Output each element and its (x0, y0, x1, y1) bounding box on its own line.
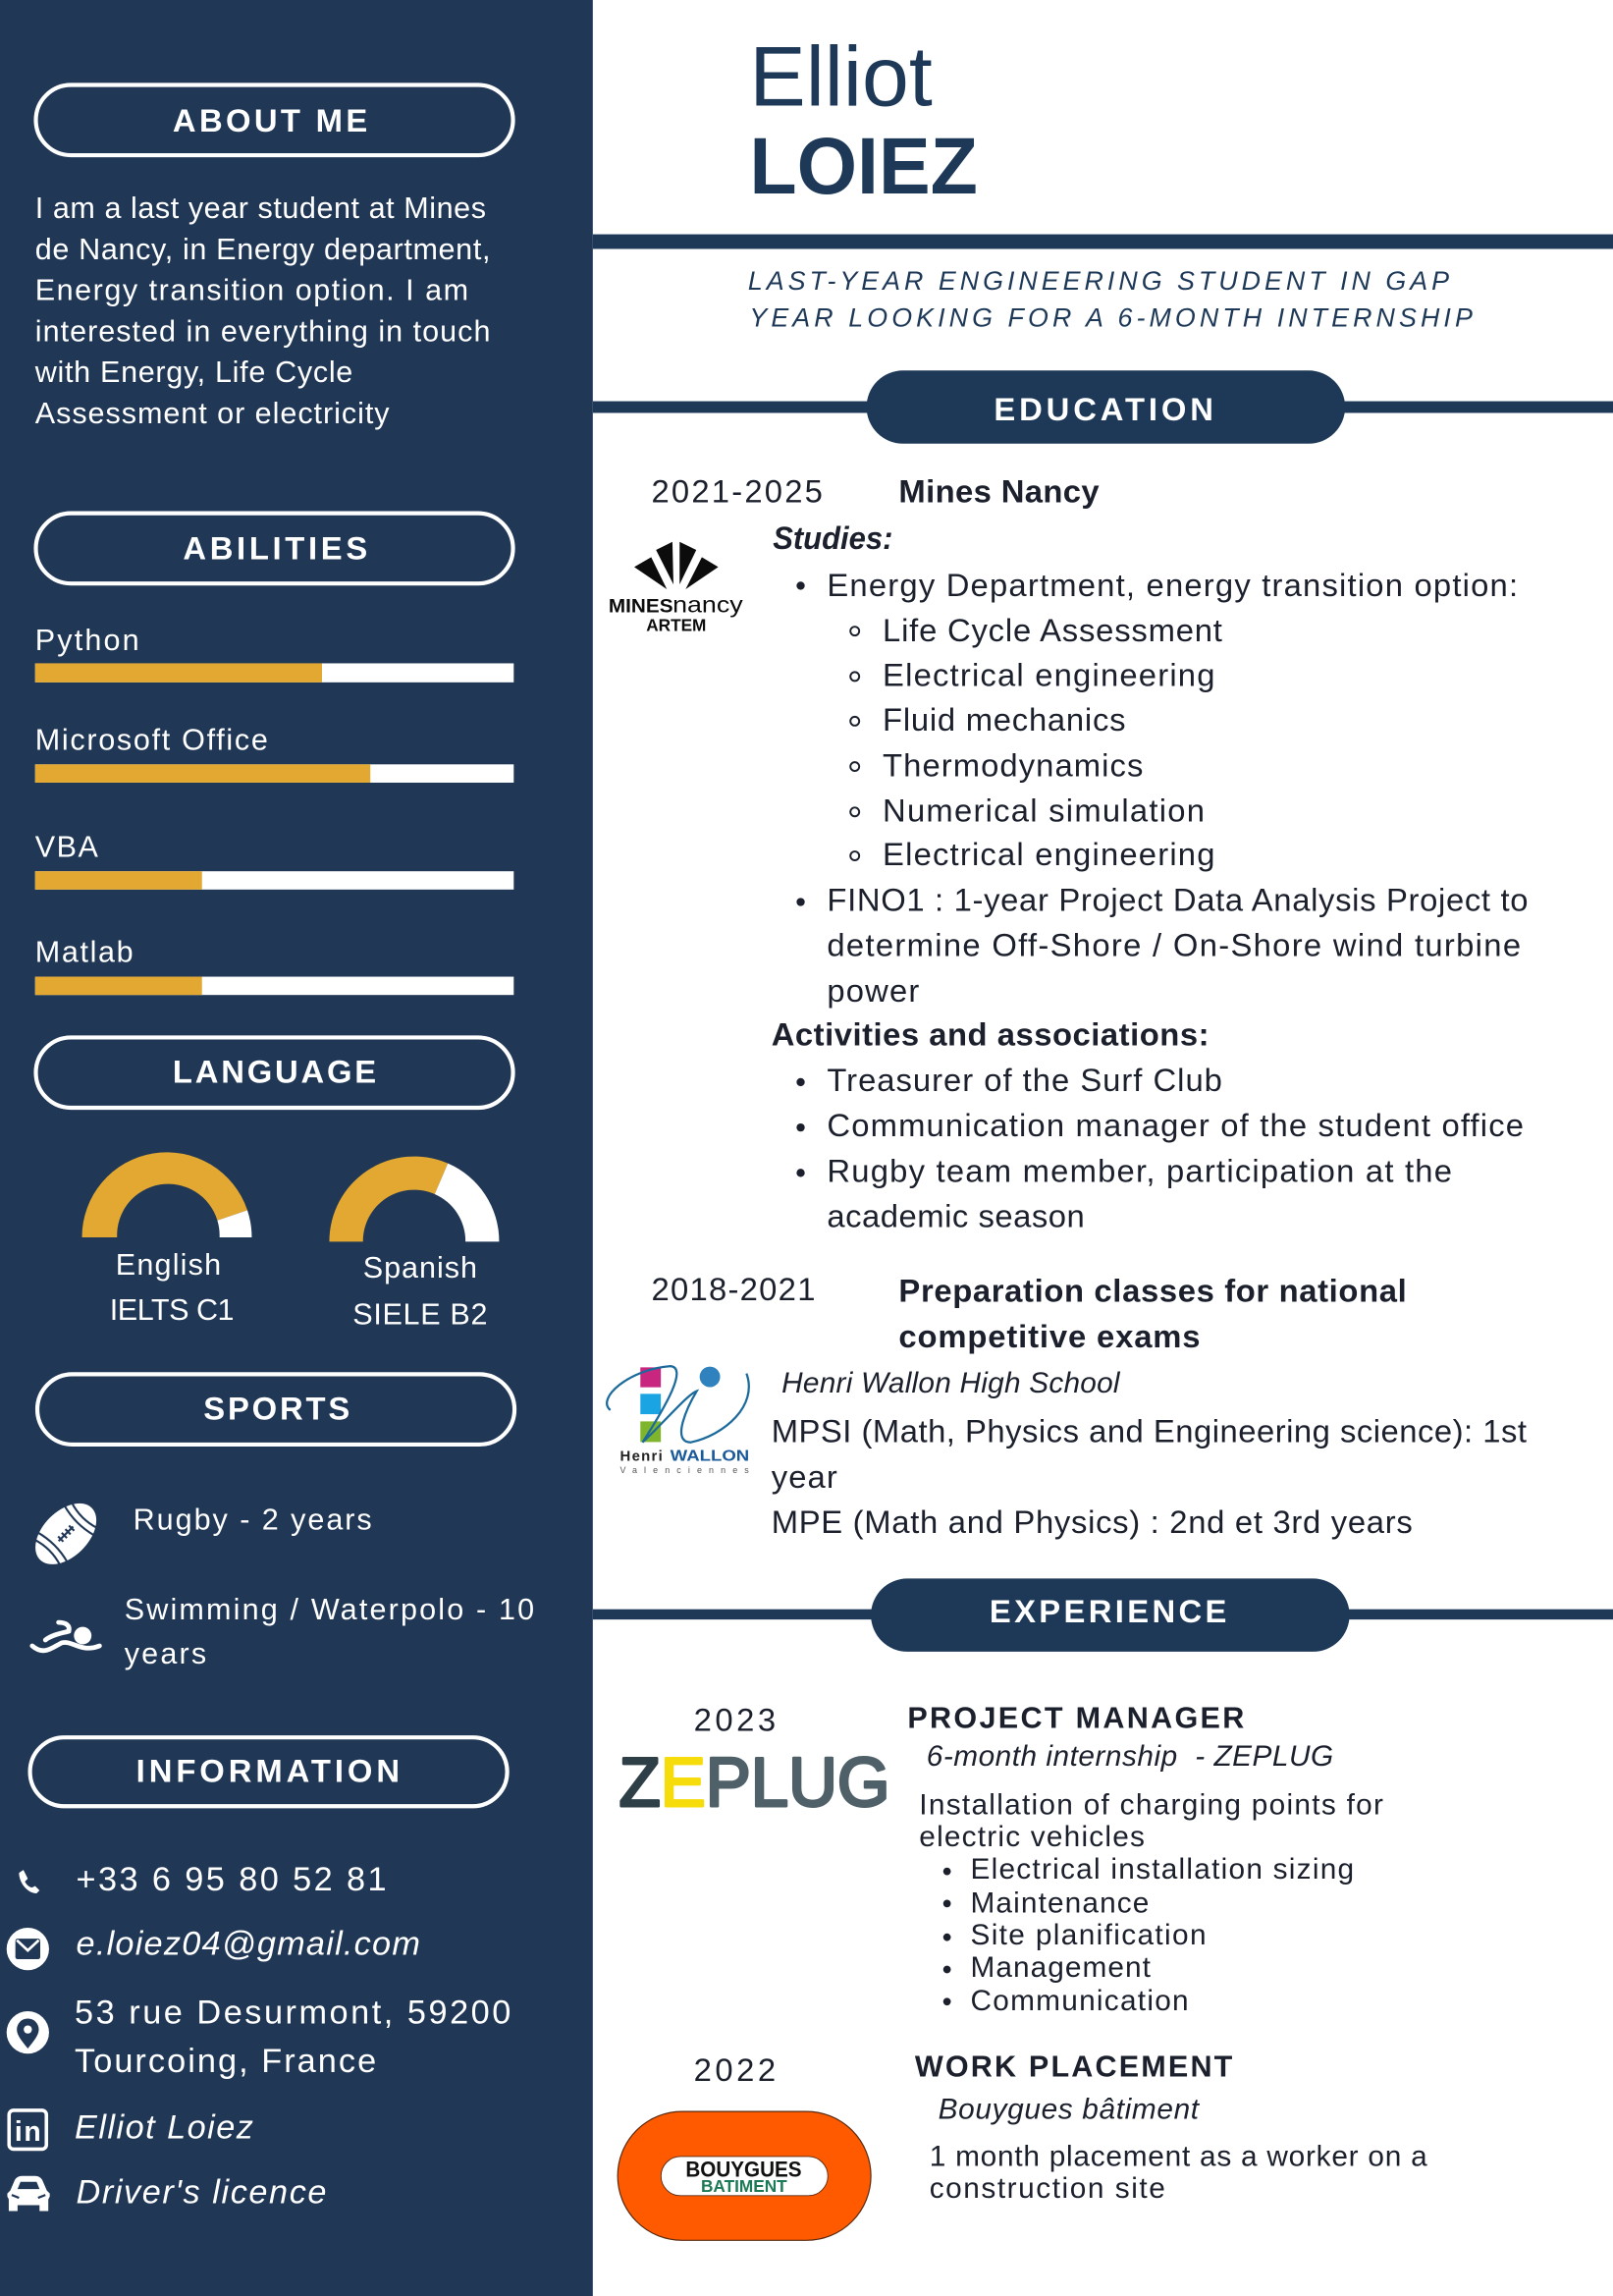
gauge: Spanish: SIELE B2 (352, 1298, 487, 1332)
icon: phone (19, 1870, 39, 1893)
text block: project manager: PROJECT MANAGER (907, 1701, 1244, 1734)
text block: project manager: 6-month internship - ZEPLUG (927, 1740, 1333, 1773)
text block: work placement: WORK PLACEMENT (915, 2050, 1233, 2083)
heading: language (36, 1037, 513, 1108)
skill bar: VBA: VBA (35, 830, 99, 863)
skill bar: Microsoft Office: Microsoft Office (35, 723, 268, 756)
text: swimming (125, 1593, 534, 1670)
heading: sports: SPORTS (203, 1391, 349, 1427)
text block: project manager (907, 1701, 1383, 2017)
text block: studies: determine Off-Shore / On-Shore wind turbine (827, 927, 1521, 963)
icon: linkedin: in (15, 2116, 41, 2148)
text block: Henri Wallon: MPE (Math and Physics) : 2nd et 3rd years (772, 1503, 1413, 1540)
logo: Henri Wallon: WALLON (671, 1448, 749, 1464)
skill bar: Python: Python (35, 624, 139, 657)
text block: project manager: Site planification (970, 1919, 1207, 1951)
skill bar: Matlab (35, 936, 513, 995)
text block: Henri Wallon: year (772, 1458, 837, 1495)
text block: studies: Fluid mechanics (883, 701, 1126, 738)
text block: project manager: Electrical installation sizing (970, 1853, 1354, 1886)
school: Mines Nancy: Mines Nancy (898, 472, 1100, 509)
text block: Henri Wallon: Henri Wallon High School (781, 1367, 1121, 1399)
logo: Henri Wallon: Valenciennes (620, 1465, 749, 1475)
heading: sports (37, 1374, 514, 1445)
icon: car (7, 2176, 50, 2212)
panel: sidebar (0, 0, 593, 2296)
text block: activities (772, 1016, 1524, 1234)
title: name: LOIEZ (749, 122, 978, 211)
text block: studies: Thermodynamics (883, 746, 1143, 783)
text: address: Tourcoing, France (75, 2043, 376, 2080)
text block: Henri Wallon: MPSI (Math, Physics and Engineering science): 1st (772, 1413, 1527, 1449)
heading: about me (36, 84, 513, 155)
gauge: English (81, 1152, 251, 1327)
icon: email (7, 1928, 49, 1970)
subtitle: tagline: LAST-YEAR ENGINEERING STUDENT IN GAP (748, 266, 1449, 296)
text block: project manager: Installation of charging points for (919, 1788, 1383, 1821)
text block: project manager: electric vehicles (919, 1821, 1145, 1853)
logo: Bouygues Batiment (618, 2111, 871, 2240)
heading: education: EDUCATION (994, 391, 1213, 427)
heading: language: LANGUAGE (173, 1054, 376, 1090)
subtitle: tagline: YEAR LOOKING FOR A 6-MONTH INTERNSHIP (749, 303, 1473, 333)
skill bar: Microsoft Office (35, 723, 513, 783)
heading: abilities: ABILITIES (183, 530, 367, 567)
text block: activities: Communication manager of the student office (827, 1107, 1524, 1143)
text block: studies: power (827, 972, 919, 1009)
skill bar: Matlab: Matlab (35, 936, 134, 969)
text block: activities: academic season (827, 1198, 1085, 1234)
text block: about me: Energy transition option. I am (35, 274, 468, 307)
date: 2021-2025: 2021-2025 (651, 472, 823, 509)
heading: abilities (36, 514, 513, 583)
text block: work placement (915, 2050, 1427, 2205)
text block: work placement: Bouygues bâtiment (939, 2094, 1201, 2126)
heading: experience: EXPERIENCE (990, 1593, 1226, 1629)
text: phone: +33 6 95 80 52 81 (77, 1861, 387, 1898)
logo: Mines Nancy ARTEM (609, 542, 743, 635)
heading: information: INFORMATION (136, 1753, 400, 1789)
text block: studies: Energy Department, energy transition option: (827, 567, 1518, 603)
subtitle: tagline (748, 266, 1473, 333)
gauge: Spanish (329, 1157, 499, 1332)
date: 2023: 2023 (694, 1701, 776, 1737)
text block: studies: Electrical engineering (883, 657, 1214, 693)
text: email: e.loiez04@gmail.com (77, 1926, 420, 1963)
text block: work placement: 1 month placement as a worker on a (930, 2140, 1427, 2172)
heading: information (30, 1737, 508, 1806)
text block: studies: FINO1 : 1-year Project Data Analysis Project to (827, 881, 1529, 917)
text block: project manager: Communication (970, 1985, 1189, 2017)
text block: about me: de Nancy, in Energy department, (35, 233, 490, 266)
date: 2018-2021: 2018-2021 (651, 1271, 815, 1307)
gauge: Spanish: Spanish (363, 1251, 477, 1285)
logo: Mines Nancy ARTEM: MINES (609, 595, 673, 617)
text block: studies: Life Cycle Assessment (883, 612, 1222, 648)
text block: about me: Assessment or electricity (35, 397, 390, 430)
logo: Henri Wallon (607, 1366, 749, 1475)
gauge: English: English (116, 1248, 221, 1282)
text block: about me (34, 191, 490, 430)
skill bar: VBA (35, 830, 513, 890)
gauge: English: IELTS C1 (110, 1293, 235, 1327)
text block: about me: with Energy, Life Cycle (34, 355, 352, 389)
title: name: Elliot (749, 29, 933, 124)
icon: swimmer (32, 1622, 99, 1651)
text block: studies: Numerical simulation (883, 792, 1205, 828)
text block: project manager: Maintenance (970, 1886, 1149, 1919)
text block: about me: I am a last year student at Mines (35, 191, 486, 225)
date: 2022: 2022 (694, 2051, 776, 2088)
text: swimming: Swimming / Waterpolo - 10 (125, 1593, 534, 1626)
text: address: 53 rue Desurmont, 59200 (75, 1995, 511, 2032)
text block: activities: Activities and associations: (772, 1016, 1210, 1053)
text block: about me: interested in everything in touch (35, 314, 490, 348)
text block: studies: Studies: (773, 519, 892, 556)
heading: education (593, 370, 1613, 444)
logo: Henri Wallon: Henri (620, 1449, 663, 1464)
text: address (75, 1995, 511, 2080)
school: preparation classes: Preparation classes for national (898, 1273, 1407, 1309)
text: rugby: Rugby - 2 years (134, 1503, 372, 1536)
text block: Henri Wallon (772, 1367, 1527, 1540)
text block: activities: Rugby team member, participation at the (827, 1152, 1452, 1188)
text block: studies: Electrical engineering (883, 836, 1214, 872)
logo: Zeplug: ZEPLUG (619, 1744, 889, 1821)
skill bar: Python (35, 624, 513, 683)
icon: rugby ball (24, 1492, 108, 1576)
logo: Mines Nancy ARTEM: nancy (672, 591, 743, 617)
title: name (749, 29, 978, 211)
logo: Bouygues Batiment: BATIMENT (701, 2176, 787, 2196)
text block: activities: Treasurer of the Surf Club (827, 1062, 1222, 1098)
school: preparation classes: competitive exams (898, 1318, 1201, 1354)
icon: location pin (7, 2011, 49, 2053)
icon: linkedin (9, 2110, 46, 2149)
heading: about me: ABOUT ME (173, 102, 367, 138)
logo: Bouygues Batiment: BOUYGUES (685, 2157, 802, 2181)
text: swimming: years (125, 1637, 206, 1670)
text: linkedin: Elliot Loiez (75, 2109, 253, 2147)
school: preparation classes (898, 1273, 1407, 1354)
text: driver's licence: Driver's licence (77, 2173, 326, 2211)
text block: studies (773, 519, 1529, 1009)
heading: experience (593, 1578, 1613, 1652)
text block: work placement: construction site (930, 2172, 1165, 2205)
panel: main column (593, 29, 1613, 2240)
logo: Mines Nancy ARTEM: ARTEM (646, 616, 706, 635)
text block: project manager: Management (970, 1951, 1152, 1984)
